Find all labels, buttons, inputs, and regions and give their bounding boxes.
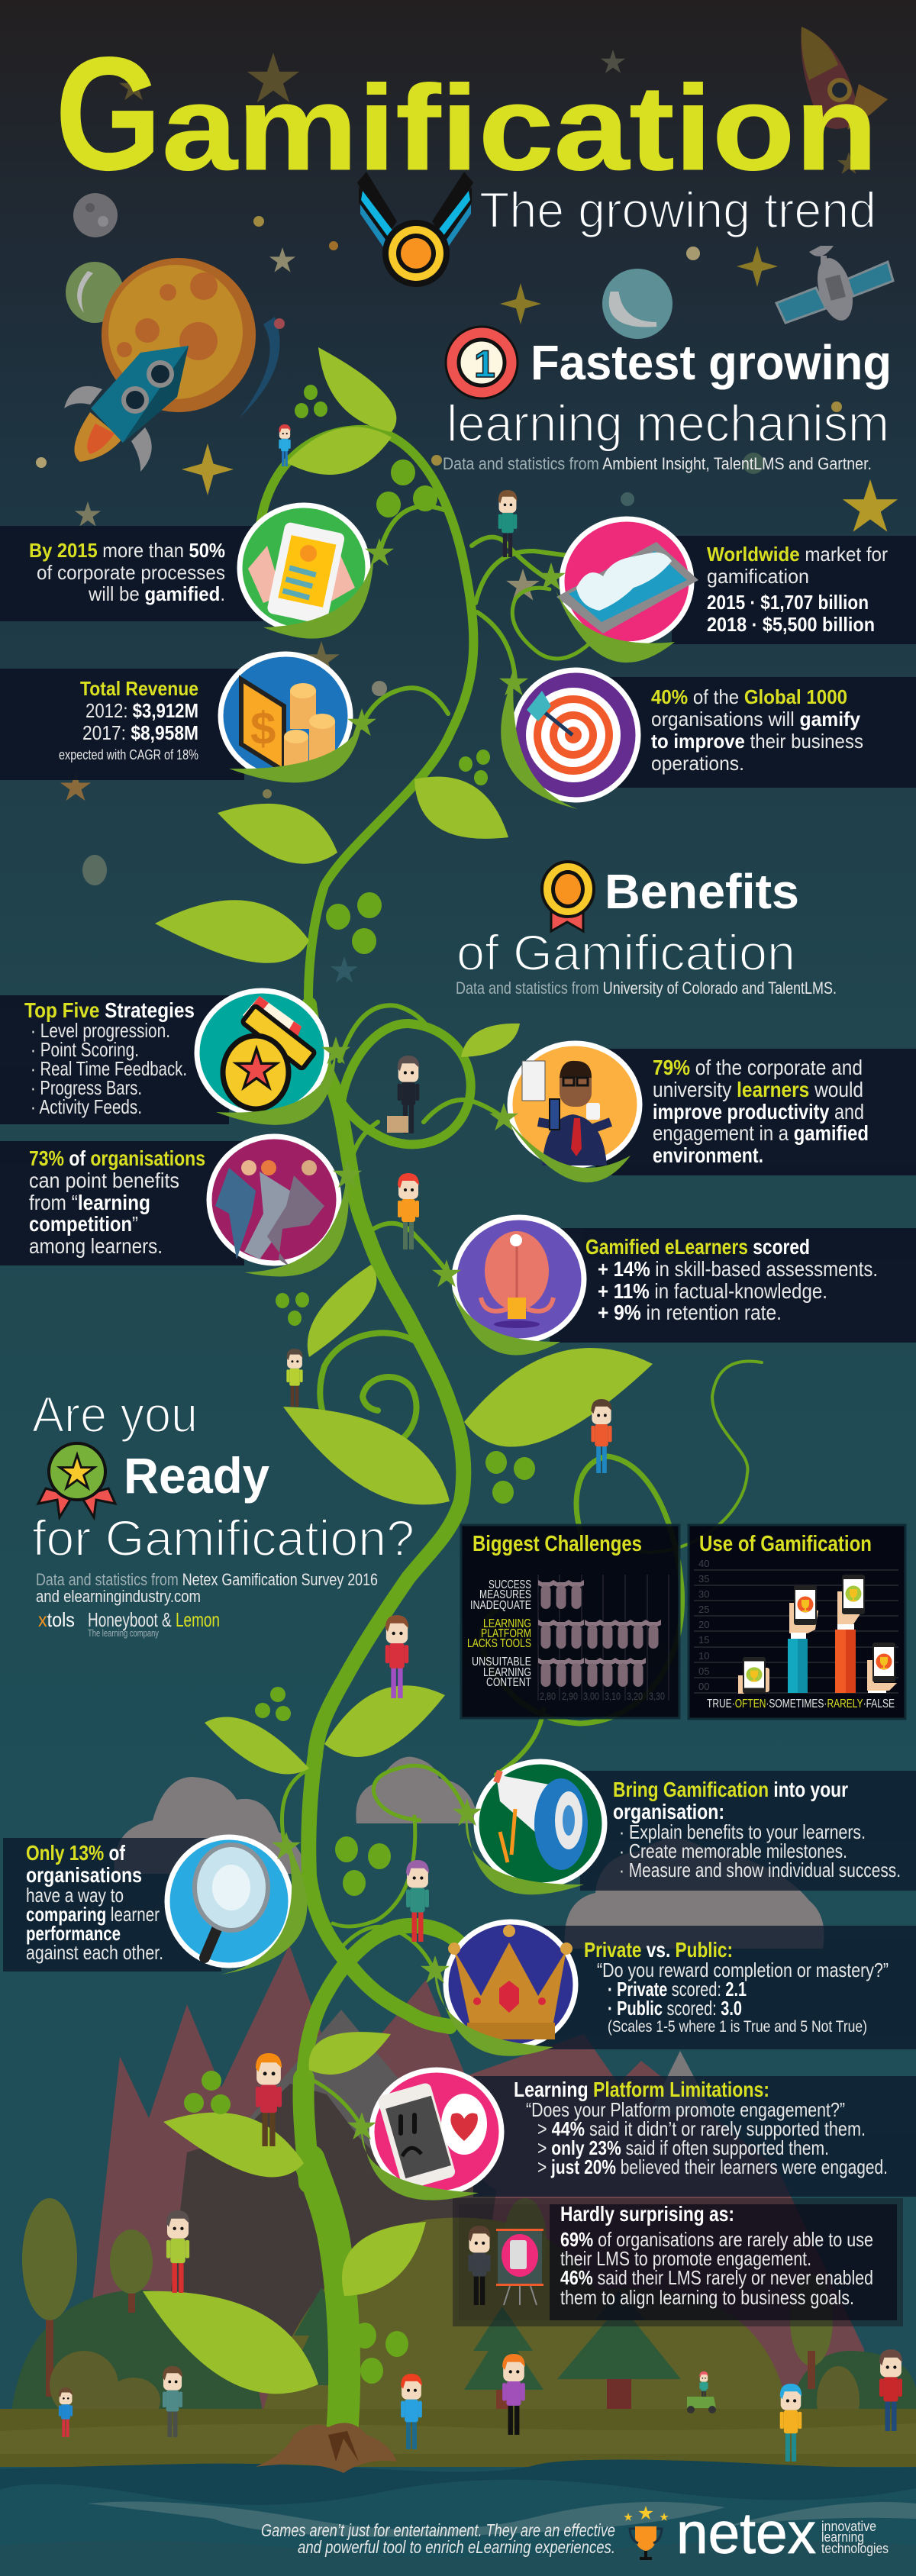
footer tagline <box>261 2520 615 2557</box>
text: total revenue: 2017: $8,958M <box>82 721 198 744</box>
text: worldwide market: 2015 · $1,707 billion <box>707 591 869 614</box>
character: orange afro <box>256 2053 282 2146</box>
text: 79% learners: improve productivity and <box>653 1100 864 1124</box>
text: worldwide market: gamification <box>707 565 809 588</box>
logo: netex: netex <box>676 2501 816 2566</box>
text: total revenue: Total Revenue <box>80 677 198 700</box>
text: gamified elearners: + 9% in retention rate. <box>598 1301 782 1324</box>
icon circle: target <box>513 670 638 800</box>
text: learning platform limitations <box>514 2078 888 2178</box>
presenter illustration <box>468 2226 543 2305</box>
text: total revenue: expected with CAGR of 18% <box>59 747 198 762</box>
text: gamified elearners: + 11% in factual-knowledge. <box>598 1279 827 1303</box>
mountains <box>76 1945 864 2442</box>
chart panel: use of gamification: 10 <box>698 1650 709 1662</box>
text: bring gamification: organisation: <box>613 1800 724 1823</box>
chart title: Biggest Challenges <box>473 1532 642 1556</box>
text: top five strategies: · Real Time Feedback. <box>31 1057 187 1080</box>
text: hardly surprising: their LMS to promote engagement. <box>560 2247 811 2270</box>
chart panel: biggest challenges: 3,00 <box>583 1690 599 1702</box>
character: red hat <box>279 424 291 466</box>
text: 73% organisations: can point benefits <box>29 1169 179 1192</box>
icon circle: phone game <box>240 505 368 630</box>
text: 79% learners: environment. <box>653 1143 763 1167</box>
text: worldwide market: 2018 · $5,500 billion <box>707 613 875 636</box>
pea dots <box>184 385 535 2384</box>
text: only 13%: against each other. <box>26 1941 163 1964</box>
text: global 1000 <box>651 685 863 775</box>
text: learning platform limitations: > only 23% said if often supported them. <box>537 2136 829 2159</box>
chart panel: use of gamification <box>689 1525 905 1719</box>
text: 73% organisations <box>29 1146 205 1258</box>
icon circle: brain <box>454 1217 584 1341</box>
logo: netex: innovative <box>821 2519 876 2534</box>
logo: netex: learning <box>821 2529 864 2545</box>
chart panel: biggest challenges: INADEQUATE <box>470 1599 531 1612</box>
pods holding the icons <box>216 538 675 2200</box>
chart panel: use of gamification: 35 <box>698 1573 709 1585</box>
text: global 1000: to improve their business <box>651 730 863 753</box>
text: top five strategies: · Point Scoring. <box>31 1038 139 1061</box>
text: bring gamification: · Explain benefits to your learners. <box>619 1820 866 1843</box>
icon circle: magnifier <box>167 1837 291 1965</box>
text: bring gamification <box>613 1778 901 1881</box>
character: orange hair <box>502 2354 525 2435</box>
text: top five strategies: · Progress Bars. <box>31 1076 142 1099</box>
panel: hardly surprising <box>456 2201 900 2323</box>
section heading: fastest growing: learning mechanism <box>447 395 889 453</box>
text: 50% corporate processes: By 2015 more than 50% <box>29 539 225 562</box>
icon circle: revenue <box>221 654 350 778</box>
chart panel: biggest challenges: LEARNING <box>483 1617 531 1630</box>
chart panel: biggest challenges: 3,10 <box>605 1690 621 1702</box>
text: gamified elearners: + 14% in skill-based assessments. <box>598 1257 878 1281</box>
chart panel: biggest challenges: LACKS TOOLS <box>467 1637 531 1650</box>
text: private vs public: · Public scored: 3.0 <box>608 1997 742 2020</box>
logo: honeyboot and lemon: The learning company <box>88 1627 159 1639</box>
section heading: benefits: of Gamification <box>456 924 795 981</box>
text: only 13%: Only 13% of <box>26 1841 126 1865</box>
text: gamified elearners: Gamified eLearners scored <box>585 1235 810 1259</box>
planet: orange <box>102 258 256 412</box>
icon: winged medal <box>357 172 473 287</box>
text: 50% corporate processes: will be gamified. <box>88 582 225 605</box>
logo: xtols: xtols <box>38 1608 75 1631</box>
icon circle: sad phone <box>372 2070 502 2194</box>
text: 79% learners: university learners would <box>653 1078 863 1101</box>
text: hardly surprising <box>560 2202 873 2309</box>
text: 73% organisations: 73% of organisations <box>29 1146 205 1170</box>
icon: number one badge <box>446 327 518 398</box>
rocket <box>64 346 189 472</box>
text: 79% learners: 79% of the corporate and <box>653 1056 863 1079</box>
chart panel: use of gamification: 40 <box>698 1558 709 1569</box>
character: scooter rider <box>687 2371 716 2413</box>
text: top five strategies <box>24 998 195 1118</box>
chart panel: biggest challenges: LEARNING <box>483 1666 531 1679</box>
chart panel: use of gamification: 05 <box>698 1665 709 1677</box>
character: laptop sitter <box>286 1349 303 1407</box>
text: hardly surprising: them to align learning to business goals. <box>560 2286 854 2309</box>
text: total revenue <box>59 677 198 762</box>
text: learning platform limitations: “Does your Platform promote engagement?” <box>526 2098 845 2121</box>
icon circle: megaphone <box>476 1762 605 1885</box>
text: 79% learners <box>653 1056 869 1167</box>
icon: number one badge: 1 <box>474 343 495 385</box>
text: private vs public: · Private scored: 2.1 <box>608 1978 747 2001</box>
chart panel: biggest challenges: PLATFORM <box>481 1627 531 1640</box>
text: bring gamification: Bring Gamification into your <box>613 1778 848 1801</box>
icon circle: world tablet <box>556 519 698 644</box>
icon circle: revenue: $ <box>250 703 276 754</box>
icon circle: competition <box>209 1136 339 1267</box>
section heading: fastest growing: Fastest growing <box>531 335 892 390</box>
character: kid <box>59 2387 73 2437</box>
text: private vs public <box>584 1938 889 2036</box>
logo: netex <box>676 2501 889 2566</box>
character: bearded man <box>591 1399 612 1473</box>
character: businessman <box>398 1056 419 1133</box>
text: top five strategies: Top Five Strategies <box>24 998 195 1022</box>
icon: star rosette <box>38 1443 115 1517</box>
text: bring gamification: · Create memorable milestones. <box>619 1839 847 1862</box>
text: learning platform limitations: Learning Platform Limitations: <box>514 2078 769 2101</box>
planet: teal <box>602 269 672 339</box>
character: briefcase <box>387 1116 408 1133</box>
text: worldwide market: Worldwide market for <box>707 543 888 566</box>
chart panel: use of gamification: 25 <box>698 1604 709 1615</box>
character: green jacket <box>498 490 517 557</box>
chart panel: use of gamification: 15 <box>698 1634 709 1646</box>
character: plant holder <box>163 2366 182 2437</box>
text: only 13% <box>26 1841 163 1964</box>
section heading: are you ready: and elearningindustry.com <box>36 1587 201 1606</box>
footer tagline: and powerful tool to enrich eLearning experiences. <box>298 2537 615 2557</box>
water waves <box>0 2459 916 2576</box>
section heading: benefits: Data and statistics from University of Colorado and TalentLMS. <box>456 978 837 998</box>
planet: gray moon <box>73 193 118 237</box>
chart panel: biggest challenges: 3,20 <box>627 1690 643 1702</box>
chart panel: biggest challenges: 2,80 <box>540 1690 556 1702</box>
x axis labels: TRUE·OFTEN·SOMETIMES·RARELY·FALSE <box>707 1697 895 1710</box>
chart panel: use of gamification: 30 <box>698 1588 709 1600</box>
character: red shirt <box>385 1615 408 1698</box>
chart title: Use of Gamification <box>699 1532 872 1556</box>
faded rocket top right <box>801 27 888 130</box>
info panels: dark bars <box>0 526 916 1343</box>
section heading: are you ready <box>32 1386 414 1639</box>
chart panel: biggest challenges: 3,30 <box>649 1690 665 1702</box>
character: purple hair <box>406 1860 429 1942</box>
ground scene: hills <box>11 2198 916 2435</box>
leaves <box>143 347 653 2394</box>
text: private vs public: (Scales 1-5 where 1 is True and 5 Not True) <box>608 2018 867 2036</box>
text: global 1000: operations. <box>651 752 744 775</box>
text: top five strategies: · Level progression. <box>31 1019 170 1042</box>
section heading: benefits <box>456 862 837 998</box>
clouds <box>114 1757 824 1949</box>
chart panel: use of gamification: 00 <box>698 1681 709 1692</box>
roots <box>256 2423 397 2473</box>
section heading: benefits: Benefits <box>605 864 799 919</box>
logo: honeyboot and lemon: Honeyboot & Lemon <box>88 1608 220 1631</box>
text: 50% corporate processes <box>29 539 225 605</box>
comet <box>240 317 285 418</box>
subtitle: The growing trend <box>479 182 876 238</box>
section heading: are you ready: Are you <box>32 1386 198 1443</box>
character: red-haired woman <box>398 1173 419 1249</box>
section heading: are you ready: for Gamification? <box>32 1510 414 1566</box>
character: blue hair goggles <box>780 2384 802 2462</box>
text: global 1000: 40% of the Global 1000 <box>651 685 847 708</box>
section heading: are you ready: Data and statistics from Netex Gamification Survey 2016 <box>36 1570 378 1589</box>
section heading: fastest growing <box>443 327 892 473</box>
text: hardly surprising: Hardly surprising as: <box>560 2202 734 2226</box>
text: global 1000: organisations will gamify <box>651 708 861 730</box>
text: learning platform limitations: > 44% said it didn’t or rarely supported them. <box>537 2117 866 2140</box>
title <box>55 23 878 204</box>
text: only 13%: performance <box>26 1922 121 1945</box>
chart panel: biggest challenges: SUCCESS <box>489 1578 531 1591</box>
chart panel: biggest challenges: 2,90 <box>562 1690 578 1702</box>
logo: honeyboot and lemon <box>88 1608 220 1639</box>
character: guitar player <box>166 2210 189 2293</box>
text: gamified elearners <box>585 1235 878 1324</box>
text: only 13%: comparing learner <box>26 1903 160 1926</box>
logo: netex: technologies <box>821 2541 889 2556</box>
chart panel: biggest challenges: CONTENT <box>486 1676 531 1689</box>
text: 50% corporate processes: of corporate processes <box>37 561 225 584</box>
icon: trophy logo <box>624 2506 669 2558</box>
chart panel: biggest challenges: UNSUITABLE <box>472 1656 531 1668</box>
title: amification <box>162 61 878 195</box>
planet: green <box>66 262 124 323</box>
icon circle: gold medal <box>197 991 327 1114</box>
chart panel: biggest challenges <box>461 1525 679 1718</box>
text: private vs public: Private vs. Public: <box>584 1938 733 1962</box>
icon circle: crown <box>446 1922 576 2047</box>
text: worldwide market <box>707 543 888 636</box>
text: only 13%: organisations <box>26 1863 142 1887</box>
character: red jacket <box>879 2349 902 2431</box>
text: 73% organisations: among learners. <box>29 1234 163 1258</box>
text: only 13%: have a way to <box>26 1884 124 1907</box>
plant stems <box>260 430 762 2435</box>
chart panel: biggest challenges: MEASURES <box>479 1588 531 1601</box>
satellite <box>776 246 893 324</box>
text: total revenue: 2012: $3,912M <box>85 699 198 722</box>
title: G <box>55 23 162 204</box>
text: 73% organisations: from “learning <box>29 1191 150 1214</box>
section heading: are you ready: Ready <box>124 1447 269 1504</box>
text: 79% learners: engagement in a gamified <box>653 1121 869 1145</box>
text: top five strategies: · Activity Feeds. <box>31 1095 142 1118</box>
section heading: fastest growing: Data and statistics from Ambient Insight, TalentLMS and Gartner. <box>443 454 872 473</box>
text: 73% organisations: competition” <box>29 1212 138 1236</box>
ground <box>0 2409 916 2471</box>
space decorations: stars and dots <box>36 50 898 982</box>
icon circle: busy man <box>510 1043 640 1165</box>
icon: rosette <box>542 862 594 931</box>
footer tagline: Games aren’t just for entertainment. They are an effective <box>261 2520 615 2540</box>
chart panel: use of gamification: 20 <box>698 1619 709 1630</box>
character: redhead <box>401 2374 422 2449</box>
